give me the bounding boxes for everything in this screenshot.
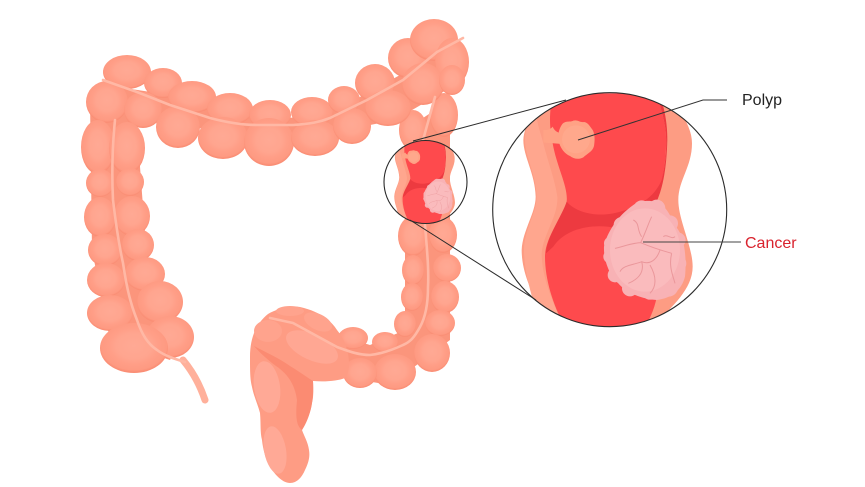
polyp label: Polyp	[742, 92, 782, 109]
cancer label: Cancer	[745, 235, 797, 252]
connecting tissue	[90, 50, 455, 385]
upper haustra	[103, 19, 469, 150]
large circle outline	[493, 93, 727, 327]
magnified view panel	[384, 93, 727, 333]
zoom connector lines	[410, 100, 566, 300]
ascending haustra	[81, 120, 194, 373]
descending haustra	[338, 216, 461, 390]
colon body	[81, 19, 469, 483]
lower haustra	[86, 63, 465, 166]
sigmoid and rectum	[250, 306, 349, 483]
small circle outline	[384, 140, 467, 224]
small circle contents	[394, 141, 455, 226]
appendix	[183, 360, 205, 400]
taenia seams	[103, 38, 463, 362]
magnified view contents	[522, 93, 693, 333]
polyp label	[578, 92, 782, 140]
